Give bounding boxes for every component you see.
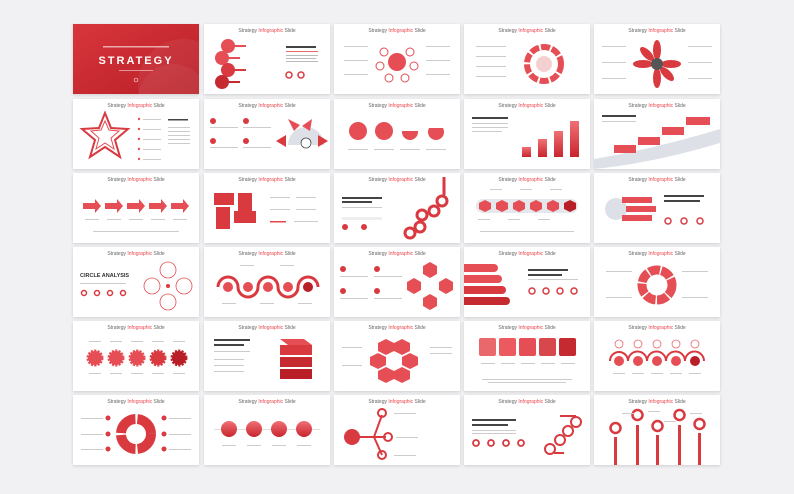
slide 10: stairs bbox=[594, 99, 720, 169]
slide 3: hub circles bbox=[334, 24, 460, 94]
slide 14: hexagons row: Strategy Infographic Slide bbox=[498, 177, 556, 183]
slide 23: hex ring bbox=[334, 321, 460, 391]
slide 4: ring segments: Strategy Infographic Slide bbox=[498, 28, 556, 34]
slide 15: circle with arrows: Strategy Infographic Slide bbox=[628, 177, 686, 183]
slide 20: ring bbox=[594, 247, 720, 317]
slide 8: bags: Strategy Infographic Slide bbox=[368, 103, 426, 109]
slide 27: four circles bbox=[204, 395, 330, 465]
slide 6: star: Strategy Infographic Slide bbox=[107, 103, 165, 109]
slide 5: flower petals: Strategy Infographic Slide bbox=[628, 28, 686, 34]
slide 28: branching circles: Strategy Infographic Slide bbox=[368, 399, 426, 405]
slide 14: hexagons row bbox=[464, 173, 590, 243]
slide 24: panels: Strategy Infographic Slide bbox=[498, 325, 556, 331]
slide 11: arrows row: Strategy Infographic Slide bbox=[107, 177, 165, 183]
slide 6: star bbox=[73, 99, 199, 169]
slide 17: wave arcs: Strategy Infographic Slide bbox=[238, 251, 296, 257]
slide 19: ribbons: Strategy Infographic Slide bbox=[498, 251, 556, 257]
slide 25: numbered arcs: Strategy Infographic Slide bbox=[628, 325, 686, 331]
slide 26: big ring with labels: Strategy Infographic Slide bbox=[107, 399, 165, 405]
slide 5: flower petals bbox=[594, 24, 720, 94]
slide 25: numbered arcs bbox=[594, 321, 720, 391]
slide 26: big ring with labels bbox=[73, 395, 199, 465]
slide 3: hub circles: Strategy Infographic Slide bbox=[368, 28, 426, 34]
slide 13: spiral bbox=[334, 173, 460, 243]
slide 30: lollipop pins bbox=[594, 395, 720, 465]
slide 22: stacked boxes bbox=[204, 321, 330, 391]
slide 12: arrow cluster: Strategy Infographic Slide bbox=[238, 177, 296, 183]
slide 15: circle with arrows bbox=[594, 173, 720, 243]
slide 16: circle analysis bbox=[73, 247, 199, 317]
slide 19: ribbons bbox=[464, 247, 590, 317]
slide 17: wave arcs bbox=[204, 247, 330, 317]
slide 18: hex cluster right bbox=[334, 247, 460, 317]
slide 16: circle analysis: Strategy Infographic Slide bbox=[107, 251, 165, 257]
slide 4: ring segments bbox=[464, 24, 590, 94]
slide 20: ring: Strategy Infographic Slide bbox=[628, 251, 686, 257]
slide 24: panels bbox=[464, 321, 590, 391]
slide 18: hex cluster right: Strategy Infographic Slide bbox=[368, 251, 426, 257]
slide 22: stacked boxes: Strategy Infographic Slide bbox=[238, 325, 296, 331]
slide 21: gears bbox=[73, 321, 199, 391]
slide 2: stacked circles bbox=[204, 24, 330, 94]
slide 9: cylinders: Strategy Infographic Slide bbox=[498, 103, 556, 109]
slide 27: four circles: Strategy Infographic Slide bbox=[238, 399, 296, 405]
slide 1: cover STRATEGY bbox=[73, 24, 199, 94]
slide 11: arrows row bbox=[73, 173, 199, 243]
slide 12: arrow cluster bbox=[204, 173, 330, 243]
slide 13: spiral: Strategy Infographic Slide bbox=[368, 177, 426, 183]
slide 7: fan: Strategy Infographic Slide bbox=[238, 103, 296, 109]
slide 29: donuts text: Strategy Infographic Slide bbox=[498, 399, 556, 405]
slide 9: cylinders bbox=[464, 99, 590, 169]
slide 7: fan bbox=[204, 99, 330, 169]
slide 21: gears: Strategy Infographic Slide bbox=[107, 325, 165, 331]
slide 2: stacked circles: Strategy Infographic Slide bbox=[238, 28, 296, 34]
slide 16: circle analysis: CIRCLE ANALYSIS bbox=[80, 273, 129, 279]
slide 29: donuts text bbox=[464, 395, 590, 465]
slide 1: cover STRATEGY: STRATEGY bbox=[98, 55, 174, 67]
slide 30: lollipop pins: Strategy Infographic Slide bbox=[628, 399, 686, 405]
slide 8: bags bbox=[334, 99, 460, 169]
slide 10: stairs: Strategy Infographic Slide bbox=[628, 103, 686, 109]
slide 28: branching circles bbox=[334, 395, 460, 465]
slide 23: hex ring: Strategy Infographic Slide bbox=[368, 325, 426, 331]
